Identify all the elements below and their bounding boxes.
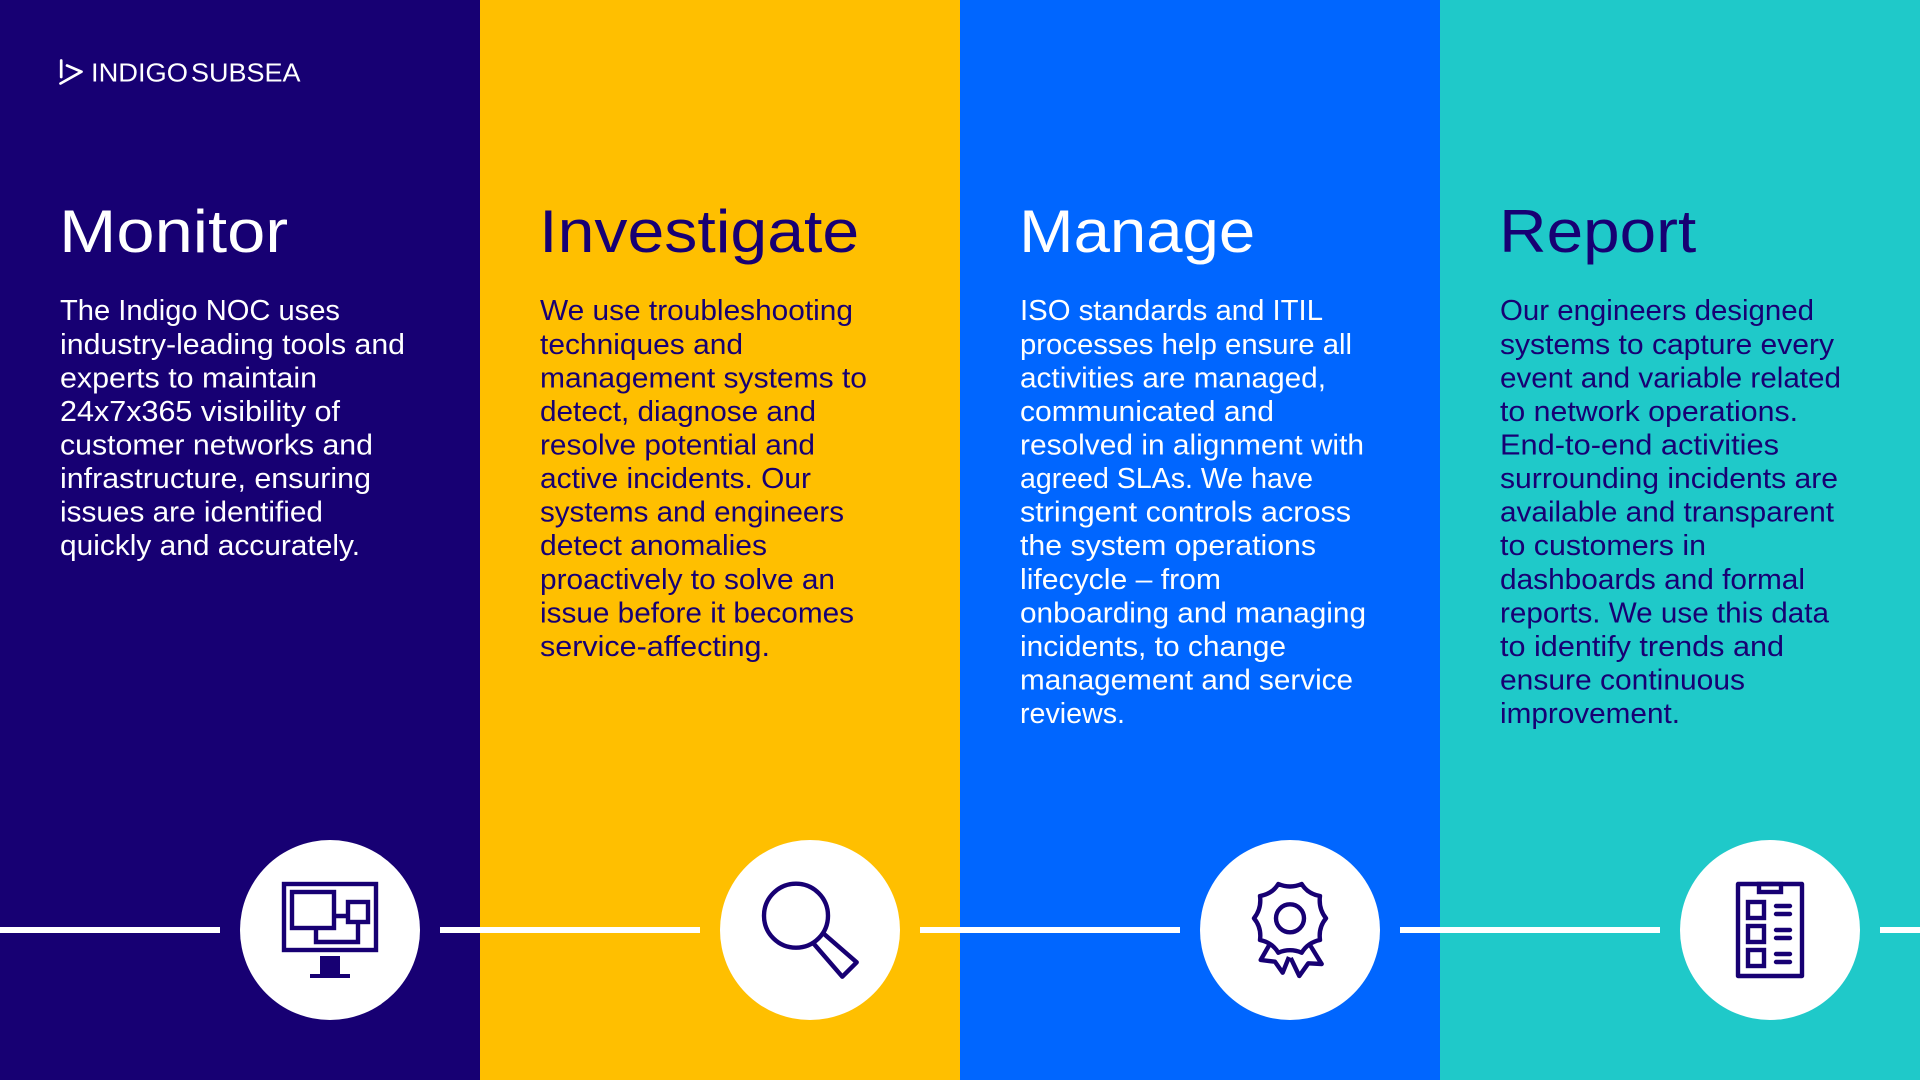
text block: Report description: surrounding incidents are <box>1500 463 1838 495</box>
heading: Report: Report <box>1499 198 1697 265</box>
text block: Investigate description: resolve potential and <box>540 429 815 461</box>
panel: Investigate <box>480 0 960 1080</box>
text block: Monitor description: The Indigo NOC uses <box>60 295 340 327</box>
text block: Manage description: lifecycle – from <box>1020 564 1221 596</box>
icon: magnifying glass in white circle <box>720 840 900 1020</box>
text block: Manage description: agreed SLAs. We have <box>1020 463 1313 495</box>
text block: Investigate description: management systems to <box>540 362 867 394</box>
text block: Manage description: processes help ensure all <box>1020 329 1352 361</box>
text block: Manage description: incidents, to change <box>1020 631 1286 663</box>
icon: monitor in white circle <box>240 840 420 1020</box>
text block: Manage description: management and service <box>1020 664 1353 696</box>
text block: Investigate description: systems and engineers <box>540 497 844 529</box>
logo: Indigo Subsea <box>60 60 300 88</box>
text block: Report description: to customers in <box>1500 530 1706 562</box>
logo: Indigo Subsea: SUBSEA <box>191 60 300 88</box>
text block: Investigate description: techniques and <box>540 329 743 361</box>
text block: Report description: dashboards and formal <box>1500 564 1805 596</box>
text block: Manage description: onboarding and managing <box>1020 597 1366 629</box>
panel: Report <box>1440 0 1920 1080</box>
text block: Report description: improvement. <box>1500 698 1680 730</box>
text block: Manage description: reviews. <box>1020 698 1125 730</box>
text block: Monitor description: issues are identified <box>60 497 323 529</box>
text block: Investigate description: active incidents. Our <box>540 463 811 495</box>
text block: Report description: reports. We use this data <box>1500 597 1830 629</box>
text block: Report description: Our engineers designed <box>1500 295 1814 327</box>
text block: Investigate description <box>540 295 867 663</box>
text block: Report description: event and variable related <box>1500 362 1841 394</box>
text block: Investigate description: detect anomalies <box>540 530 767 562</box>
text block: Monitor description: experts to maintain <box>60 362 317 394</box>
text block: Report description: ensure continuous <box>1500 664 1745 696</box>
heading: Monitor: Monitor <box>59 198 288 265</box>
heading: Investigate: Investigate <box>539 198 859 265</box>
text block: Report description: End-to-end activities <box>1500 429 1779 461</box>
text block: Investigate description: service-affecting. <box>540 631 770 663</box>
text block: Monitor description: customer networks and <box>60 429 373 461</box>
icon: award rosette in white circle <box>1200 840 1380 1020</box>
text block: Monitor description <box>60 295 405 562</box>
text block: Monitor description: quickly and accurately. <box>60 530 360 562</box>
text block: Investigate description: detect, diagnose and <box>540 396 816 428</box>
text block: Manage description: resolved in alignment with <box>1020 429 1364 461</box>
heading: Manage: Manage <box>1019 198 1255 265</box>
text block: Report description <box>1500 295 1841 730</box>
text block: Manage description: activities are managed, <box>1020 362 1326 394</box>
icon: checklist clipboard in white circle <box>1680 840 1860 1020</box>
text block: Manage description: the system operations <box>1020 530 1316 562</box>
text block: Manage description: ISO standards and ITIL <box>1020 295 1323 327</box>
panel: Manage <box>960 0 1440 1080</box>
text block: Manage description: stringent controls across <box>1020 497 1351 529</box>
text block: Manage description: communicated and <box>1020 396 1274 428</box>
text block: Manage description <box>1020 295 1366 730</box>
logo: Indigo Subsea: INDIGO <box>91 60 188 88</box>
text block: Monitor description: infrastructure, ensuring <box>60 463 371 495</box>
connector line across panels <box>0 927 1920 933</box>
text block: Investigate description: proactively to solve an <box>540 564 835 596</box>
text block: Report description: to network operations. <box>1500 396 1798 428</box>
text block: Investigate description: issue before it becomes <box>540 597 854 629</box>
text block: Report description: available and transparent <box>1500 497 1834 529</box>
text block: Monitor description: 24x7x365 visibility of <box>60 396 341 428</box>
text block: Report description: to identify trends and <box>1500 631 1784 663</box>
text block: Investigate description: We use troubleshooting <box>540 295 853 327</box>
text block: Report description: systems to capture every <box>1500 329 1835 361</box>
panel: Monitor <box>0 0 480 1080</box>
text block: Monitor description: industry-leading tools and <box>60 329 405 361</box>
